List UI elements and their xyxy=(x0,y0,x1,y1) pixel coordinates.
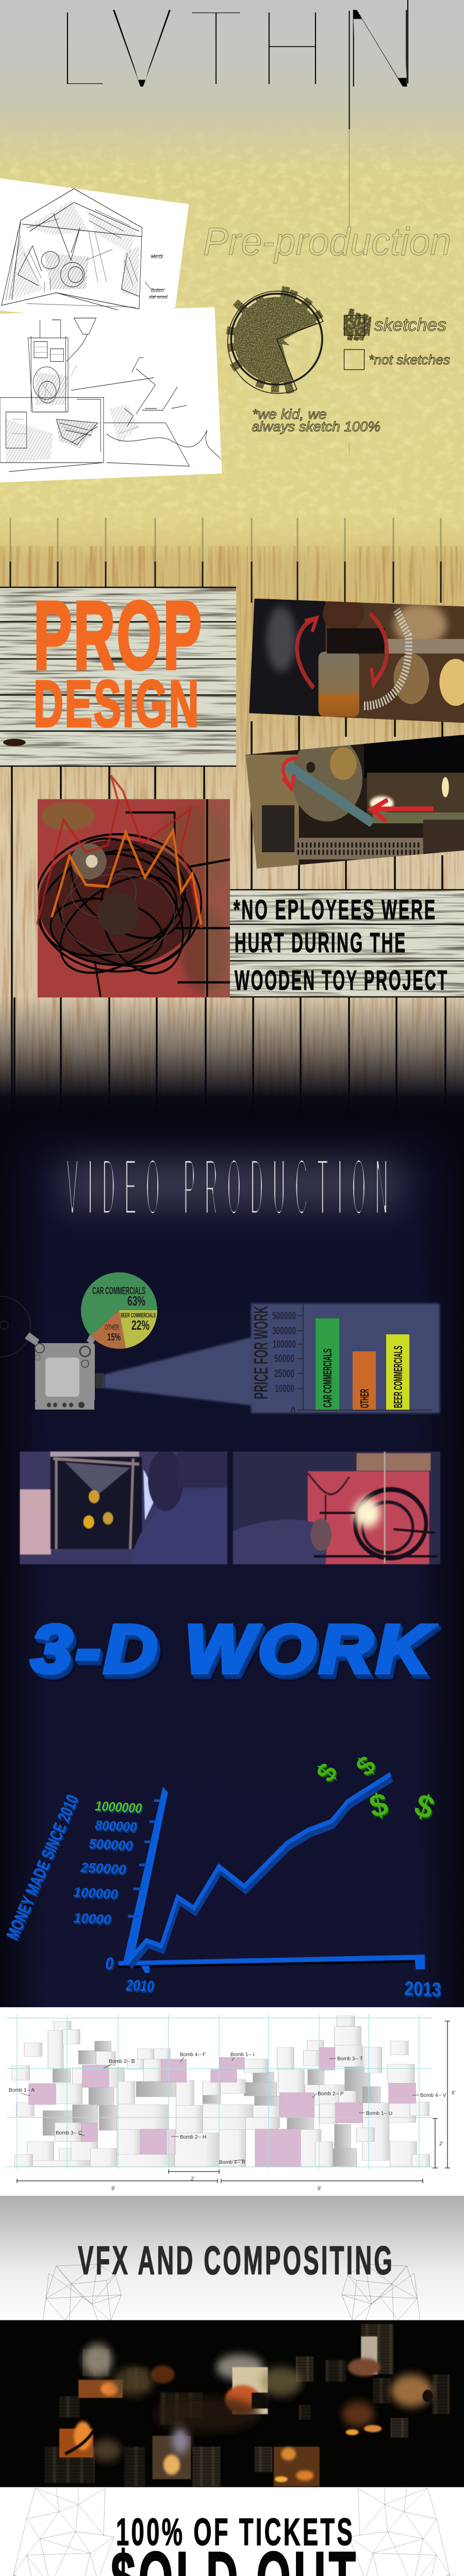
panel: video production background xyxy=(0,1113,464,2008)
chart: pie of commercials: 63% xyxy=(127,1293,145,1309)
diagram: pink bomb zones xyxy=(29,2047,416,2167)
diagram: bomb labels: Bomb 4-- R xyxy=(219,2160,245,2165)
legend: not sketches: *not sketches xyxy=(369,352,450,367)
diagram: dimension markers: 2′ xyxy=(191,2176,195,2182)
image: composite crate wall, dark xyxy=(0,2320,464,2487)
photo: wire ball prop with flame scribble xyxy=(31,775,230,997)
diagram: dimension markers: 8′ xyxy=(318,2186,322,2192)
chart: money made since 2010 line: 500000 xyxy=(89,1836,134,1853)
chart: price for work bars: 0 xyxy=(291,1405,295,1417)
projector light beam xyxy=(104,1337,253,1405)
fade from wood to night xyxy=(0,997,464,1115)
heading: 3-D WORK: 3-D WORK xyxy=(31,1611,435,1687)
diagram: bomb layout white panel xyxy=(0,2007,464,2196)
footnote: we kid: *we kid, we xyxy=(252,406,327,422)
diagram: white crate wall xyxy=(12,2016,429,2167)
chart: price for work bars: 25000 xyxy=(274,1368,294,1380)
sketch image: cube: Mirror xyxy=(151,254,163,260)
photo: gear arm prop with arrows xyxy=(243,733,464,870)
diagram: bomb labels: Bomb 3-- T xyxy=(337,2056,363,2062)
legend: not sketches xyxy=(344,349,450,370)
chart: money made since 2010 line: MONEY MADE SINCE 2010 xyxy=(3,1792,82,1942)
background: paper to wood xyxy=(0,0,464,567)
heading: 100% of tickets sold out xyxy=(111,2511,359,2576)
chart: money made since 2010 line: 2010 xyxy=(125,1977,155,1995)
mesh: VFX left and right xyxy=(43,2264,420,2320)
chart: money made since 2010 line: 2013 xyxy=(404,1978,441,2001)
panel: footnote boards xyxy=(230,889,464,997)
legend: sketches: sketches xyxy=(374,315,446,335)
chart: price for work bars: 50000 xyxy=(274,1353,294,1365)
chart: price for work bars: 300000 xyxy=(272,1325,296,1337)
chart: pie of commercials: CAR COMMERCIALS xyxy=(92,1285,145,1297)
sketch image: cube: Botten xyxy=(151,287,164,294)
photo: bottle prop with rotation arrows xyxy=(248,596,464,726)
icon: projector xyxy=(0,1296,104,1410)
chart: pie of commercials: BEER COMMERCIALS xyxy=(121,1313,156,1319)
footnote: we kid: always sketch 100% xyxy=(252,419,380,434)
chart: pie of commercials xyxy=(81,1272,157,1349)
legend: sketches xyxy=(344,309,446,340)
diagram: bomb labels xyxy=(9,2052,446,2165)
title: LVTHN top xyxy=(55,0,420,453)
chart: price for work bars: BEER COMMERCIALS xyxy=(391,1346,405,1408)
sketch image: machine xyxy=(0,307,222,483)
heading: PROP DESIGN: PROP xyxy=(34,581,203,689)
chart: money made since 2010 line: $ xyxy=(310,1758,343,1787)
mesh: tickets left and right xyxy=(13,2488,450,2576)
chart: pie of commercials: 22% xyxy=(131,1317,150,1333)
diagram: dimension markers xyxy=(17,2021,456,2192)
chart: money made since 2010 line xyxy=(3,1750,441,2001)
diagram: dimension markers: 2′ xyxy=(439,2141,443,2147)
video still: artist at crate xyxy=(20,1450,227,1564)
chart: price for work bars: 500000 xyxy=(272,1310,296,1322)
sketch image: cube: slat wood xyxy=(149,294,168,300)
panel: grey fade behind VFX heading xyxy=(0,2196,464,2320)
diagram: bomb labels: Bomb 3-- C xyxy=(56,2130,82,2136)
chart: pie of commercials: 15% xyxy=(107,1332,121,1343)
heading: PROP DESIGN xyxy=(34,581,203,741)
diagram: bomb labels: Bomb 2-- H xyxy=(180,2134,206,2140)
section heading: Pre-production: Pre-production xyxy=(203,220,451,264)
chart: price for work bars: 10000 xyxy=(275,1383,294,1395)
chart: price for work bars: CAR COMMERCIALS xyxy=(321,1349,334,1408)
chart: money made since 2010 line: $ xyxy=(410,1787,439,1826)
chart: money made since 2010 line: $ xyxy=(367,1786,391,1825)
chart: money made since 2010 line: 250000 xyxy=(80,1859,127,1877)
footnote: we kid xyxy=(252,406,380,434)
chart: price for work bars: PRICE FOR WORK xyxy=(251,1306,272,1399)
video still: wire ball xyxy=(233,1451,440,1564)
chart: money made since 2010 line: 100000 xyxy=(73,1884,119,1902)
diagram: dimension markers: 6′ xyxy=(452,2090,456,2096)
chart: price for work bars: OTHER xyxy=(358,1389,371,1408)
diagram: bomb labels: Bomb 2-- B xyxy=(109,2059,135,2064)
chart: price for work bars: 100000 xyxy=(273,1338,296,1350)
chart: price for work bars xyxy=(251,1303,440,1417)
diagram: bomb labels: Bomb 4-- F xyxy=(180,2052,206,2058)
panel: white band behind tickets heading xyxy=(0,2487,464,2576)
chart: pie of commercials: OTHER xyxy=(105,1324,119,1332)
diagram: bomb labels: Bomb 1-- U xyxy=(366,2111,392,2116)
wood wall background xyxy=(0,510,464,1113)
diagram: dimension markers: 8′ xyxy=(111,2186,115,2192)
diagram: bomb labels: Bomb 1-- I xyxy=(230,2052,255,2058)
chart: money made since 2010 line: $ xyxy=(350,1750,382,1782)
panel: horizontal boards behind prop design xyxy=(0,587,236,766)
chart: money made since 2010 line: 800000 xyxy=(95,1817,138,1835)
diagram: bomb labels: Bomb 1-- A xyxy=(9,2088,35,2093)
chart: money made since 2010 line: 1000000 xyxy=(95,1798,143,1816)
sketch image: cube xyxy=(0,178,189,318)
chart: money made since 2010 line: 0 xyxy=(105,1954,113,1973)
heading: PROP DESIGN: DESIGN xyxy=(34,667,200,741)
pie chart: sketches vs not sketches xyxy=(227,287,323,394)
diagram: bomb labels: Bomb 2-- P xyxy=(318,2091,344,2097)
diagram: bomb labels: Bomb 4-- V xyxy=(420,2093,446,2098)
chart: money made since 2010 line: 10000 xyxy=(73,1910,112,1927)
diagram: grid lines xyxy=(7,2014,432,2169)
